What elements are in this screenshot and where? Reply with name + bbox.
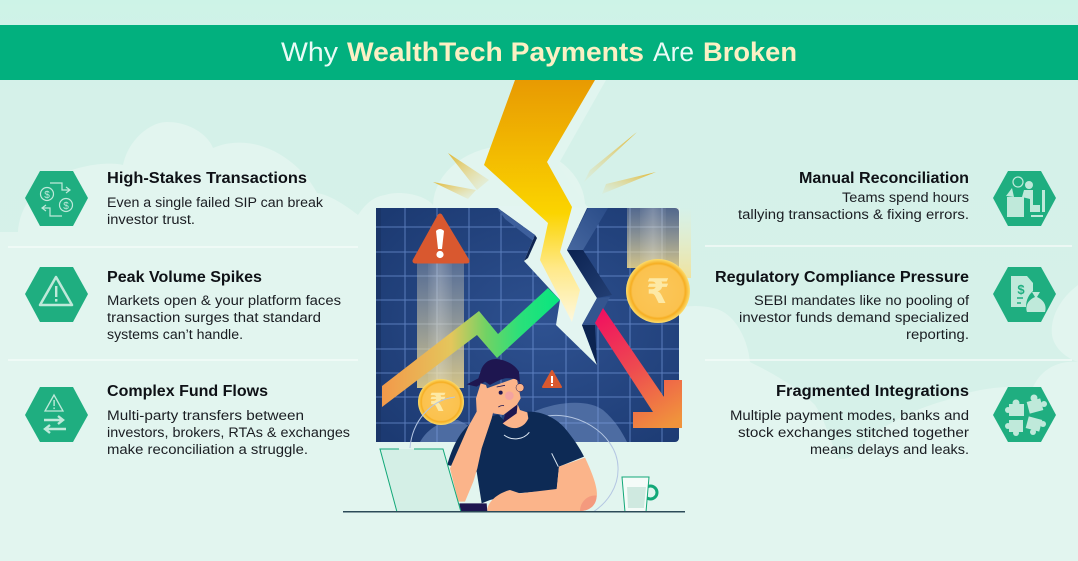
body text xyxy=(107,195,323,227)
body text: systems can’t handle. xyxy=(107,327,243,342)
icon: money exchange hexagon xyxy=(25,171,88,226)
body text: tallying transactions & fixing errors. xyxy=(738,207,969,222)
body text: reporting. xyxy=(906,327,969,342)
title banner xyxy=(0,25,1078,80)
icon: warning triangle large xyxy=(415,216,467,261)
panel: peak volume spikes xyxy=(25,267,341,342)
body text: investor funds demand specialized xyxy=(739,310,969,325)
body text: Teams spend hours xyxy=(842,190,969,205)
sleeve highlight xyxy=(552,453,558,467)
icon: money exchange hexagon: $ xyxy=(63,201,69,212)
neck xyxy=(503,403,528,428)
heading: Complex Fund Flows xyxy=(107,383,268,400)
laptop base xyxy=(459,503,487,512)
heading: Fragmented Integrations xyxy=(776,383,969,400)
body text: stock exchanges stitched together xyxy=(738,425,970,440)
body text: investor trust. xyxy=(107,212,195,227)
illustration: broken chart screen xyxy=(376,80,691,442)
icon: rupee coin lower xyxy=(418,379,464,425)
dividers xyxy=(8,246,1072,360)
title banner: Are xyxy=(653,37,694,67)
body text xyxy=(107,293,341,342)
raised arm xyxy=(450,383,493,502)
icon: warning hexagon xyxy=(25,267,88,322)
icon: document and money bag hexagon: $ xyxy=(1017,282,1025,297)
spark rays xyxy=(433,132,656,199)
face xyxy=(487,378,521,415)
panel: fragmented integrations xyxy=(730,383,1056,457)
icon: rupee coin lower: ₹ xyxy=(429,388,447,417)
falling arrow xyxy=(595,308,682,428)
laptop xyxy=(380,449,461,512)
body text xyxy=(730,408,970,457)
lightning bolt xyxy=(484,80,606,322)
icon: document and money bag hexagon xyxy=(993,267,1056,322)
cup xyxy=(622,477,657,512)
cheek xyxy=(505,391,514,400)
body text: means delays and leaks. xyxy=(810,442,969,457)
thin circle outline xyxy=(410,397,618,512)
body text xyxy=(739,293,969,342)
icon: rupee coin upper xyxy=(626,259,690,323)
illustration: stressed person at desk xyxy=(343,359,685,512)
heading: Peak Volume Spikes xyxy=(107,269,262,286)
body text: Markets open & your platform faces xyxy=(107,293,341,308)
coin beams xyxy=(417,208,691,388)
eye brow and mouth xyxy=(497,385,505,407)
ear xyxy=(516,384,524,392)
body text: make reconciliation a struggle. xyxy=(107,442,308,457)
body text: transaction surges that standard xyxy=(107,310,321,325)
icon: warning triangle small xyxy=(543,371,561,387)
chin shadow xyxy=(503,404,518,423)
icon: rupee coin upper: ₹ xyxy=(646,272,670,312)
title banner: WealthTech Payments xyxy=(347,37,644,67)
right arm xyxy=(487,458,597,511)
title banner: Why xyxy=(281,37,339,67)
elbow patch xyxy=(580,496,597,511)
body text xyxy=(738,190,969,222)
panel: complex fund flows xyxy=(25,383,350,457)
panel: manual reconciliation xyxy=(738,170,1056,226)
shirt xyxy=(447,412,584,503)
heading: Regulatory Compliance Pressure xyxy=(715,269,969,286)
icon: puzzle pieces hexagon xyxy=(993,387,1056,442)
icon: warning with transfer arrows hexagon xyxy=(25,387,88,442)
icon: person at desk hexagon xyxy=(993,171,1056,226)
hair xyxy=(467,359,520,387)
rising arrow xyxy=(382,288,560,407)
heading: Manual Reconciliation xyxy=(799,170,969,187)
person xyxy=(447,359,597,512)
body text: Multiple payment modes, banks and xyxy=(730,408,969,423)
collar xyxy=(504,432,529,439)
body text: Even a single failed SIP can break xyxy=(107,195,323,210)
body text: investors, brokers, RTAs & exchanges xyxy=(107,425,350,440)
chart panel xyxy=(376,208,679,442)
panel: regulatory compliance pressure xyxy=(715,267,1056,342)
title banner: Broken xyxy=(703,37,797,67)
body text: SEBI mandates like no pooling of xyxy=(754,293,969,308)
body text xyxy=(107,408,350,457)
crack xyxy=(495,206,612,365)
icon: money exchange hexagon: $ xyxy=(44,190,50,201)
heading: High-Stakes Transactions xyxy=(107,170,307,187)
desk line xyxy=(343,511,685,512)
body text: Multi-party transfers between xyxy=(107,408,304,423)
panel: high-stakes transactions xyxy=(25,170,323,227)
